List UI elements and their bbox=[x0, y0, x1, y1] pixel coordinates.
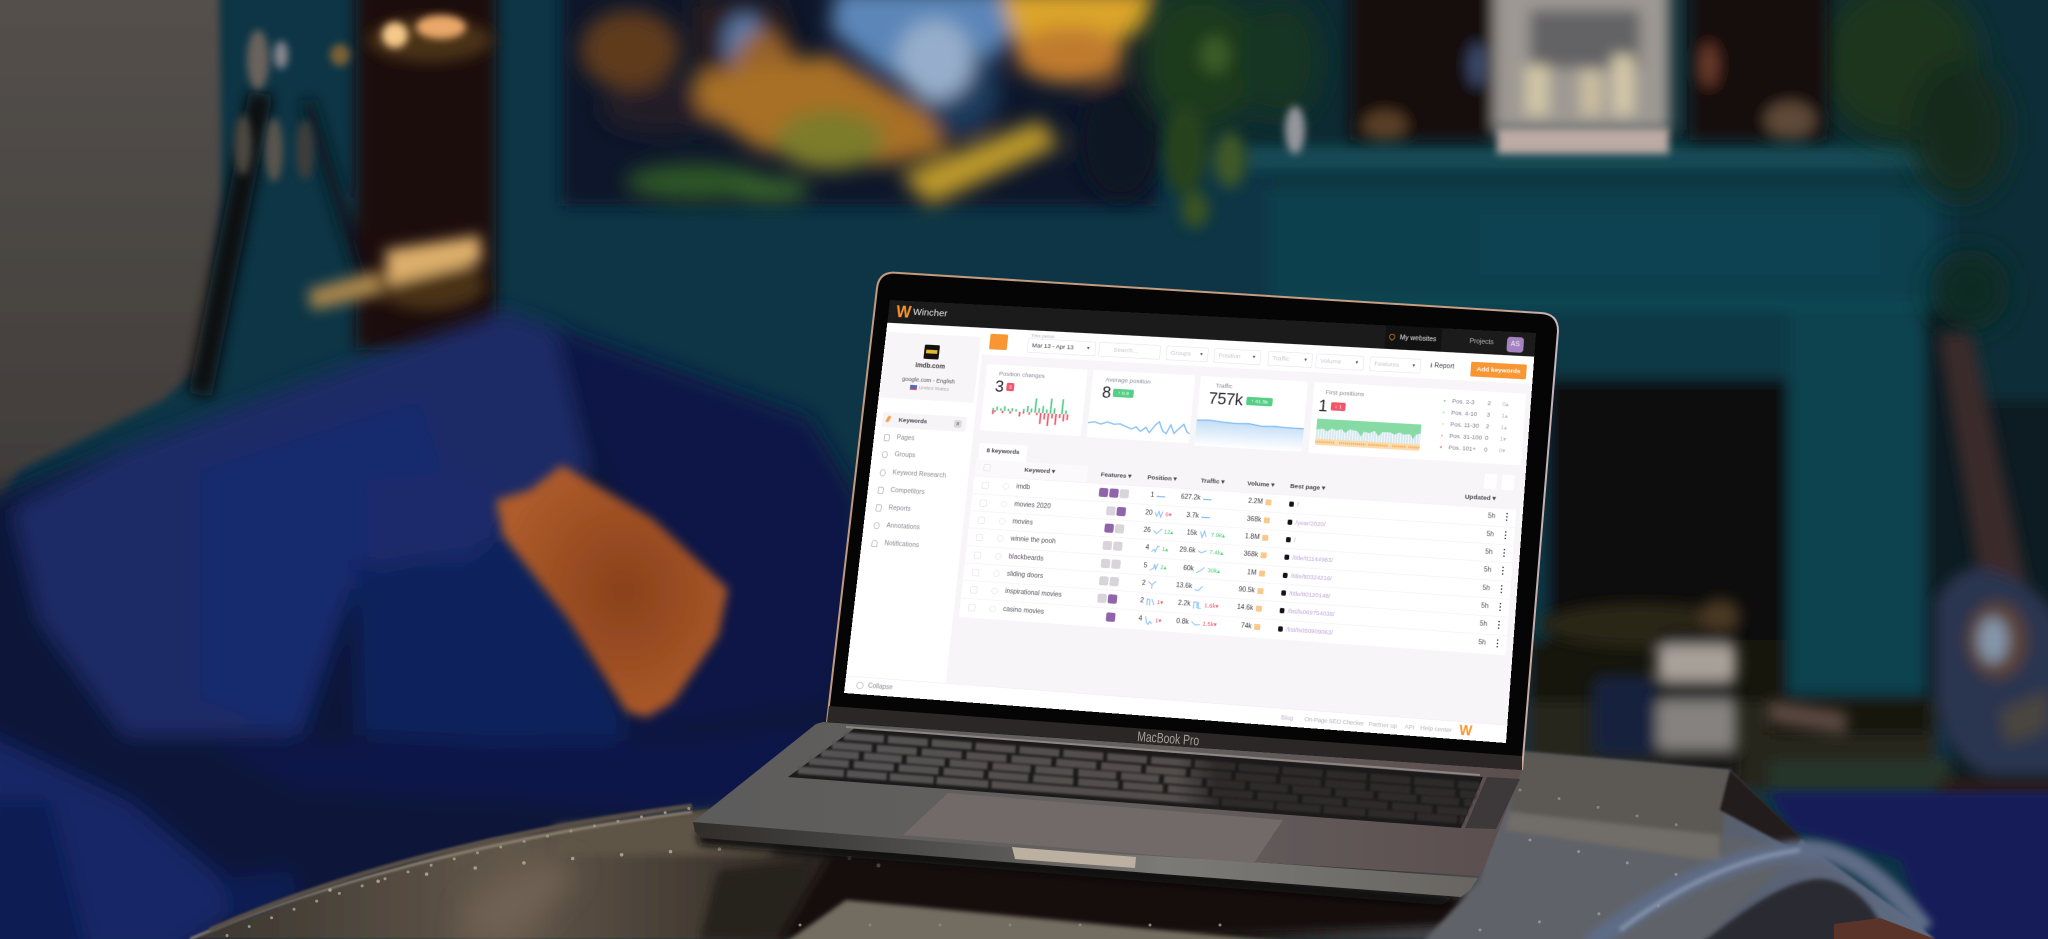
row: winnie the pooh bbox=[967, 528, 1512, 582]
row: sliding doors bbox=[963, 562, 1510, 618]
projects tab: Projects bbox=[1469, 338, 1494, 346]
filter: Position: ▼ bbox=[1252, 355, 1256, 360]
keyboard well bbox=[788, 728, 1483, 828]
nav item: Reports: Reports bbox=[888, 504, 911, 513]
row: blackbeards: blackbeards bbox=[1008, 553, 1044, 562]
row: inspirational movies: 5h bbox=[1479, 620, 1488, 628]
row: casino movies bbox=[959, 597, 1507, 654]
card title: First positions bbox=[1325, 389, 1364, 398]
row: movies 2020: 3.7k bbox=[1186, 512, 1199, 519]
header: Traffic: Traffic ▾ bbox=[1200, 477, 1225, 486]
row: movies: movies bbox=[1012, 518, 1033, 526]
area chart: traffic bbox=[1195, 419, 1304, 448]
row: blackbeards: 1M bbox=[1247, 569, 1257, 576]
row: winnie the pooh: /title/tt1144983/ bbox=[1292, 555, 1333, 564]
row: movies: 26 bbox=[1143, 527, 1151, 534]
row: winnie the pooh: 5h bbox=[1484, 566, 1492, 574]
footer link: Help center: Help center bbox=[1420, 724, 1452, 733]
card value: 757k bbox=[1208, 390, 1243, 409]
toolbar bbox=[982, 328, 1534, 384]
row: imdb: imdb bbox=[1016, 483, 1030, 491]
row: sliding doors: 2 bbox=[1142, 579, 1146, 587]
icon: flag bbox=[910, 385, 917, 390]
bar chart: position changes bbox=[991, 398, 1069, 426]
row: imdb: / bbox=[1297, 502, 1299, 508]
legend: positions bbox=[1440, 397, 1509, 454]
badge: keyword count: 8 bbox=[956, 421, 960, 427]
row: movies: / bbox=[1294, 537, 1296, 543]
row: movies: 5h bbox=[1485, 548, 1493, 556]
avatar bbox=[1506, 337, 1524, 353]
row: sliding doors: 5h bbox=[1481, 602, 1489, 610]
add keywords button: Add keywords bbox=[1476, 366, 1521, 375]
row: movies 2020 bbox=[971, 493, 1515, 546]
icon: Wincher logo: W bbox=[895, 302, 912, 321]
row: inspirational movies: 14.6k bbox=[1237, 604, 1254, 612]
badge: keyword count bbox=[954, 420, 962, 428]
KPI: average position bbox=[1087, 370, 1195, 443]
domain name: imdb.com bbox=[915, 362, 945, 371]
header: Best page: Best page ▾ bbox=[1290, 483, 1325, 492]
filter: Volume: ▼ bbox=[1354, 361, 1359, 365]
KPI: first positions bbox=[1308, 382, 1526, 465]
legend row: Pos. 31-100: 0 bbox=[1485, 435, 1489, 441]
lid metal edge bbox=[827, 273, 1558, 770]
date picker: Mar 13 - Apr 13 bbox=[1032, 342, 1074, 351]
card value: 8 bbox=[1101, 384, 1112, 402]
lid chin bbox=[827, 706, 1522, 770]
orange throw pillow bbox=[496, 465, 728, 717]
nav item: Groups: Groups bbox=[894, 451, 916, 459]
green badge: ↑ 41.5k bbox=[1251, 398, 1268, 405]
row: casino movies: casino movies bbox=[1003, 605, 1044, 615]
table settings button bbox=[1501, 475, 1515, 490]
row: sliding doors: 90.5k bbox=[1238, 586, 1255, 594]
card title: Position changes bbox=[999, 370, 1045, 380]
base deck bbox=[693, 722, 1522, 876]
nav item: Pages: Pages bbox=[896, 434, 915, 442]
row: winnie the pooh: winnie the pooh bbox=[1010, 536, 1056, 545]
row: imdb: 2.2M bbox=[1248, 498, 1263, 506]
KPI: traffic bbox=[1194, 376, 1308, 452]
row: casino movies: 1▾ bbox=[1155, 617, 1162, 624]
KPI: position changes bbox=[980, 364, 1088, 436]
filter: Traffic: Traffic bbox=[1272, 355, 1290, 363]
icon: competitors bbox=[877, 487, 884, 494]
header: Updated: Updated ▾ bbox=[1465, 493, 1496, 502]
legend row: Pos. 101+ bbox=[1440, 444, 1506, 454]
row: casino movies: 5h bbox=[1478, 638, 1486, 646]
row: movies: 7.9k▴ bbox=[1211, 531, 1225, 539]
search box bbox=[1098, 342, 1161, 360]
wall painting bbox=[562, 0, 1160, 206]
orange refresh button bbox=[989, 334, 1008, 350]
mantel ornaments and framed print bbox=[1285, 0, 1827, 154]
row: imdb: 627.2k bbox=[1181, 494, 1201, 502]
icon: research bbox=[880, 469, 886, 476]
date picker: ▼ bbox=[1086, 346, 1091, 351]
lid shell bbox=[827, 273, 1558, 770]
legend row: Pos. 2-3 bbox=[1443, 397, 1509, 407]
row: inspirational movies: 1.6k▾ bbox=[1204, 602, 1219, 610]
red badge: ↓ 1 bbox=[1334, 404, 1342, 410]
nav item: Annotations: Annotations bbox=[886, 522, 920, 531]
laptop lid bbox=[827, 273, 1558, 770]
legend row: Pos. 31-100: 1▾ bbox=[1500, 436, 1506, 442]
filter: Groups: ▼ bbox=[1199, 352, 1204, 357]
row: blackbeards: 5 bbox=[1143, 562, 1148, 569]
nav item: Notifications: Notifications bbox=[884, 540, 919, 549]
card title: Average position bbox=[1105, 376, 1151, 386]
nav item: Keywords: Keywords bbox=[898, 417, 928, 425]
row: blackbeards: 2▴ bbox=[1160, 564, 1167, 571]
row: movies 2020: movies 2020 bbox=[1014, 501, 1051, 510]
card value: 1 bbox=[1318, 397, 1328, 415]
row: blackbeards: 60k bbox=[1183, 564, 1194, 572]
red badge bbox=[1331, 402, 1346, 411]
nav item: Keyword Research: Keyword Research bbox=[892, 469, 946, 479]
row: casino movies: 74k bbox=[1241, 622, 1252, 630]
left plaster wall bbox=[0, 0, 222, 530]
opening notch bbox=[1012, 847, 1136, 868]
legend row: Pos. 11-30: Pos. 11-30 bbox=[1450, 421, 1479, 429]
icon: footer Wincher logo: W bbox=[1459, 721, 1473, 739]
hearth bottles and bokeh bbox=[1540, 599, 1847, 780]
keyboard highlight bbox=[846, 727, 1480, 775]
icon: pin bbox=[1388, 333, 1396, 341]
legend row: Pos. 31-100: ▪ bbox=[1440, 432, 1443, 439]
footer link: On-Page SEO Checker: On-Page SEO Checker bbox=[1304, 716, 1364, 727]
row: imdb: 1 bbox=[1150, 492, 1155, 499]
green badge bbox=[1246, 397, 1273, 406]
base shadow bbox=[696, 833, 1461, 905]
filter: Features: Features bbox=[1374, 360, 1399, 369]
legend row: Pos. 11-30: 1▴ bbox=[1500, 424, 1507, 431]
row: inspirational movies: inspirational movies bbox=[1005, 588, 1062, 599]
search engine: google.com - English bbox=[902, 376, 955, 385]
row: blackbeards: 30k▴ bbox=[1207, 567, 1220, 574]
filter: Features bbox=[1369, 356, 1421, 374]
icon: reports bbox=[875, 504, 882, 512]
app header bar bbox=[887, 300, 1536, 357]
legend row: Pos. 4-10: ▪ bbox=[1442, 409, 1445, 416]
row: imdb bbox=[972, 476, 1516, 528]
country: United States bbox=[919, 385, 949, 392]
card title: Traffic bbox=[1215, 382, 1233, 390]
filter: Traffic: ▼ bbox=[1303, 358, 1308, 363]
row: casino movies: 1.5k▾ bbox=[1202, 620, 1217, 627]
table header left bbox=[974, 459, 1088, 482]
filter: Position: Position bbox=[1218, 352, 1241, 360]
header: Keyword: Keyword ▾ bbox=[1024, 467, 1055, 475]
legend row: Pos. 101+: ▪ bbox=[1440, 444, 1442, 450]
main grey background bbox=[946, 354, 1532, 725]
row: winnie the pooh: 368k bbox=[1243, 551, 1258, 559]
green badge bbox=[1113, 389, 1134, 398]
footer link: Blog: Blog bbox=[1281, 714, 1293, 722]
legend row: Pos. 2-3: 2 bbox=[1487, 400, 1491, 407]
search box: Search... bbox=[1113, 347, 1138, 355]
legend row: Pos. 31-100: Pos. 31-100 bbox=[1449, 433, 1482, 441]
row: casino movies: 4 bbox=[1138, 615, 1142, 622]
icon: pages bbox=[884, 434, 890, 441]
date label: Time period bbox=[1031, 334, 1055, 340]
keywords table bbox=[959, 476, 1516, 655]
row: movies bbox=[969, 510, 1514, 564]
legend row: Pos. 2-3: ▪ bbox=[1443, 397, 1446, 404]
filter: Position bbox=[1213, 348, 1261, 365]
speaker grille bbox=[1465, 777, 1520, 829]
hanging plants bbox=[1140, 0, 2010, 330]
navy sofa at left bbox=[0, 311, 860, 939]
navy sofa at right bbox=[1770, 792, 2048, 939]
my websites tab: My websites bbox=[1399, 334, 1437, 343]
row: casino movies: 0.8k bbox=[1176, 617, 1189, 626]
laptop base with keyboard and trackpad bbox=[693, 722, 1522, 905]
row: movies: 1.8M bbox=[1245, 533, 1260, 541]
row: movies 2020: 20 bbox=[1145, 509, 1153, 517]
footer link: API: API bbox=[1404, 723, 1415, 731]
legend row: Pos. 101+: 0▾ bbox=[1499, 447, 1506, 454]
legend row: Pos. 4-10 bbox=[1442, 409, 1508, 419]
footer link: Partner up: Partner up bbox=[1368, 721, 1397, 729]
brand name: Wincher bbox=[912, 307, 948, 319]
header: Features: Features ▾ bbox=[1100, 471, 1132, 480]
filter: Volume bbox=[1315, 353, 1364, 371]
row: movies: 15k bbox=[1186, 529, 1197, 537]
filter: Traffic bbox=[1267, 351, 1313, 368]
filter: Volume: Volume bbox=[1320, 358, 1341, 366]
legend row: Pos. 101+: Pos. 101+ bbox=[1448, 444, 1476, 452]
row: inspirational movies bbox=[961, 580, 1508, 636]
line chart: average position bbox=[1088, 420, 1190, 435]
row: winnie the pooh: 1▴ bbox=[1162, 546, 1169, 553]
icon: collapse bbox=[856, 682, 864, 689]
floor lamp tripod and dark column with bokeh lights bbox=[200, 0, 496, 395]
riveted metal table bbox=[190, 751, 1935, 939]
base front lip bbox=[693, 822, 1478, 897]
row: sliding doors: /title/tt0120148/ bbox=[1289, 590, 1331, 599]
icon: groups bbox=[882, 451, 888, 458]
row: sliding doors: 13.6k bbox=[1176, 582, 1192, 590]
filter: Groups bbox=[1165, 346, 1209, 362]
row: inspirational movies: /list/ls069754038/ bbox=[1287, 608, 1335, 618]
stacked bar chart: first positions bbox=[1315, 418, 1422, 451]
legend row: Pos. 11-30 bbox=[1441, 421, 1507, 431]
legend row: Pos. 31-100 bbox=[1440, 432, 1506, 442]
row: winnie the pooh: 7.4k▴ bbox=[1209, 549, 1224, 556]
filter: Features: ▼ bbox=[1411, 364, 1416, 368]
icon: keywords bbox=[885, 415, 892, 423]
red badge: 3 bbox=[1009, 384, 1012, 390]
row: winnie the pooh: 29.6k bbox=[1179, 547, 1196, 555]
trackpad bbox=[903, 793, 1283, 863]
row: imdb: 5h bbox=[1488, 513, 1496, 520]
row: movies 2020: 5h bbox=[1486, 531, 1494, 538]
my websites tab bbox=[1384, 325, 1442, 352]
row: movies 2020: /year/2020/ bbox=[1295, 519, 1326, 528]
icon: annotations bbox=[873, 522, 880, 529]
legend row: Pos. 11-30: 2 bbox=[1486, 423, 1489, 430]
tab: 8 keywords: 8 keywords bbox=[986, 447, 1020, 456]
card value: 3 bbox=[994, 378, 1005, 396]
avatar: AS bbox=[1511, 341, 1520, 348]
header checkbox bbox=[983, 464, 991, 471]
legend row: Pos. 11-30: ▪ bbox=[1441, 421, 1444, 427]
legend row: Pos. 2-3: 0▴ bbox=[1502, 401, 1509, 407]
row: blackbeards bbox=[965, 545, 1511, 600]
row: sliding doors: sliding doors bbox=[1006, 570, 1043, 580]
row: inspirational movies: 2 bbox=[1140, 597, 1144, 605]
collapse label: Collapse bbox=[868, 682, 893, 691]
row: movies 2020: 6▾ bbox=[1165, 511, 1172, 518]
legend row: Pos. 4-10: 1▴ bbox=[1501, 412, 1508, 419]
footer separator bbox=[846, 676, 1507, 725]
tab: 8 keywords bbox=[978, 443, 1028, 462]
domain card bbox=[879, 332, 981, 403]
icon: notifications bbox=[871, 540, 878, 547]
row: blackbeards: /title/tt0324216/ bbox=[1291, 572, 1332, 582]
add keywords button bbox=[1470, 362, 1527, 379]
report button: ⭳ Report bbox=[1430, 362, 1455, 370]
row: movies 2020: 368k bbox=[1247, 515, 1262, 523]
sidebar active item bbox=[881, 412, 967, 432]
filter: Groups: Groups bbox=[1170, 350, 1191, 358]
MacBook Pro label: MacBook Pro bbox=[1137, 728, 1200, 748]
row: casino movies: /list/ls050909063/ bbox=[1286, 626, 1333, 636]
legend row: Pos. 4-10: 3 bbox=[1486, 411, 1490, 418]
header: Volume: Volume ▾ bbox=[1247, 480, 1275, 489]
table action buttons bbox=[1484, 474, 1497, 489]
row: inspirational movies: 2.2k bbox=[1178, 600, 1191, 608]
row: movies: 12▴ bbox=[1163, 528, 1174, 536]
date picker bbox=[1027, 338, 1096, 356]
row: inspirational movies: 1▾ bbox=[1157, 599, 1163, 606]
row: blackbeards: 5h bbox=[1482, 584, 1490, 592]
legend row: Pos. 101+: 0 bbox=[1484, 446, 1488, 453]
sidebar bbox=[846, 323, 984, 683]
header: Position: Position ▾ bbox=[1147, 474, 1177, 483]
green badge: ↑ 0.9 bbox=[1117, 390, 1129, 396]
icon: imdb logo bbox=[923, 345, 940, 360]
legend row: Pos. 4-10: Pos. 4-10 bbox=[1451, 409, 1477, 417]
keyboard keys bbox=[798, 736, 1479, 820]
laptop screen: Wincher dashboard bbox=[844, 300, 1536, 743]
nav item: Competitors: Competitors bbox=[890, 487, 925, 496]
row: winnie the pooh: 4 bbox=[1145, 544, 1149, 552]
guitar bbox=[1935, 333, 2048, 776]
red badge bbox=[1006, 383, 1015, 391]
legend row: Pos. 2-3: Pos. 2-3 bbox=[1452, 398, 1475, 406]
